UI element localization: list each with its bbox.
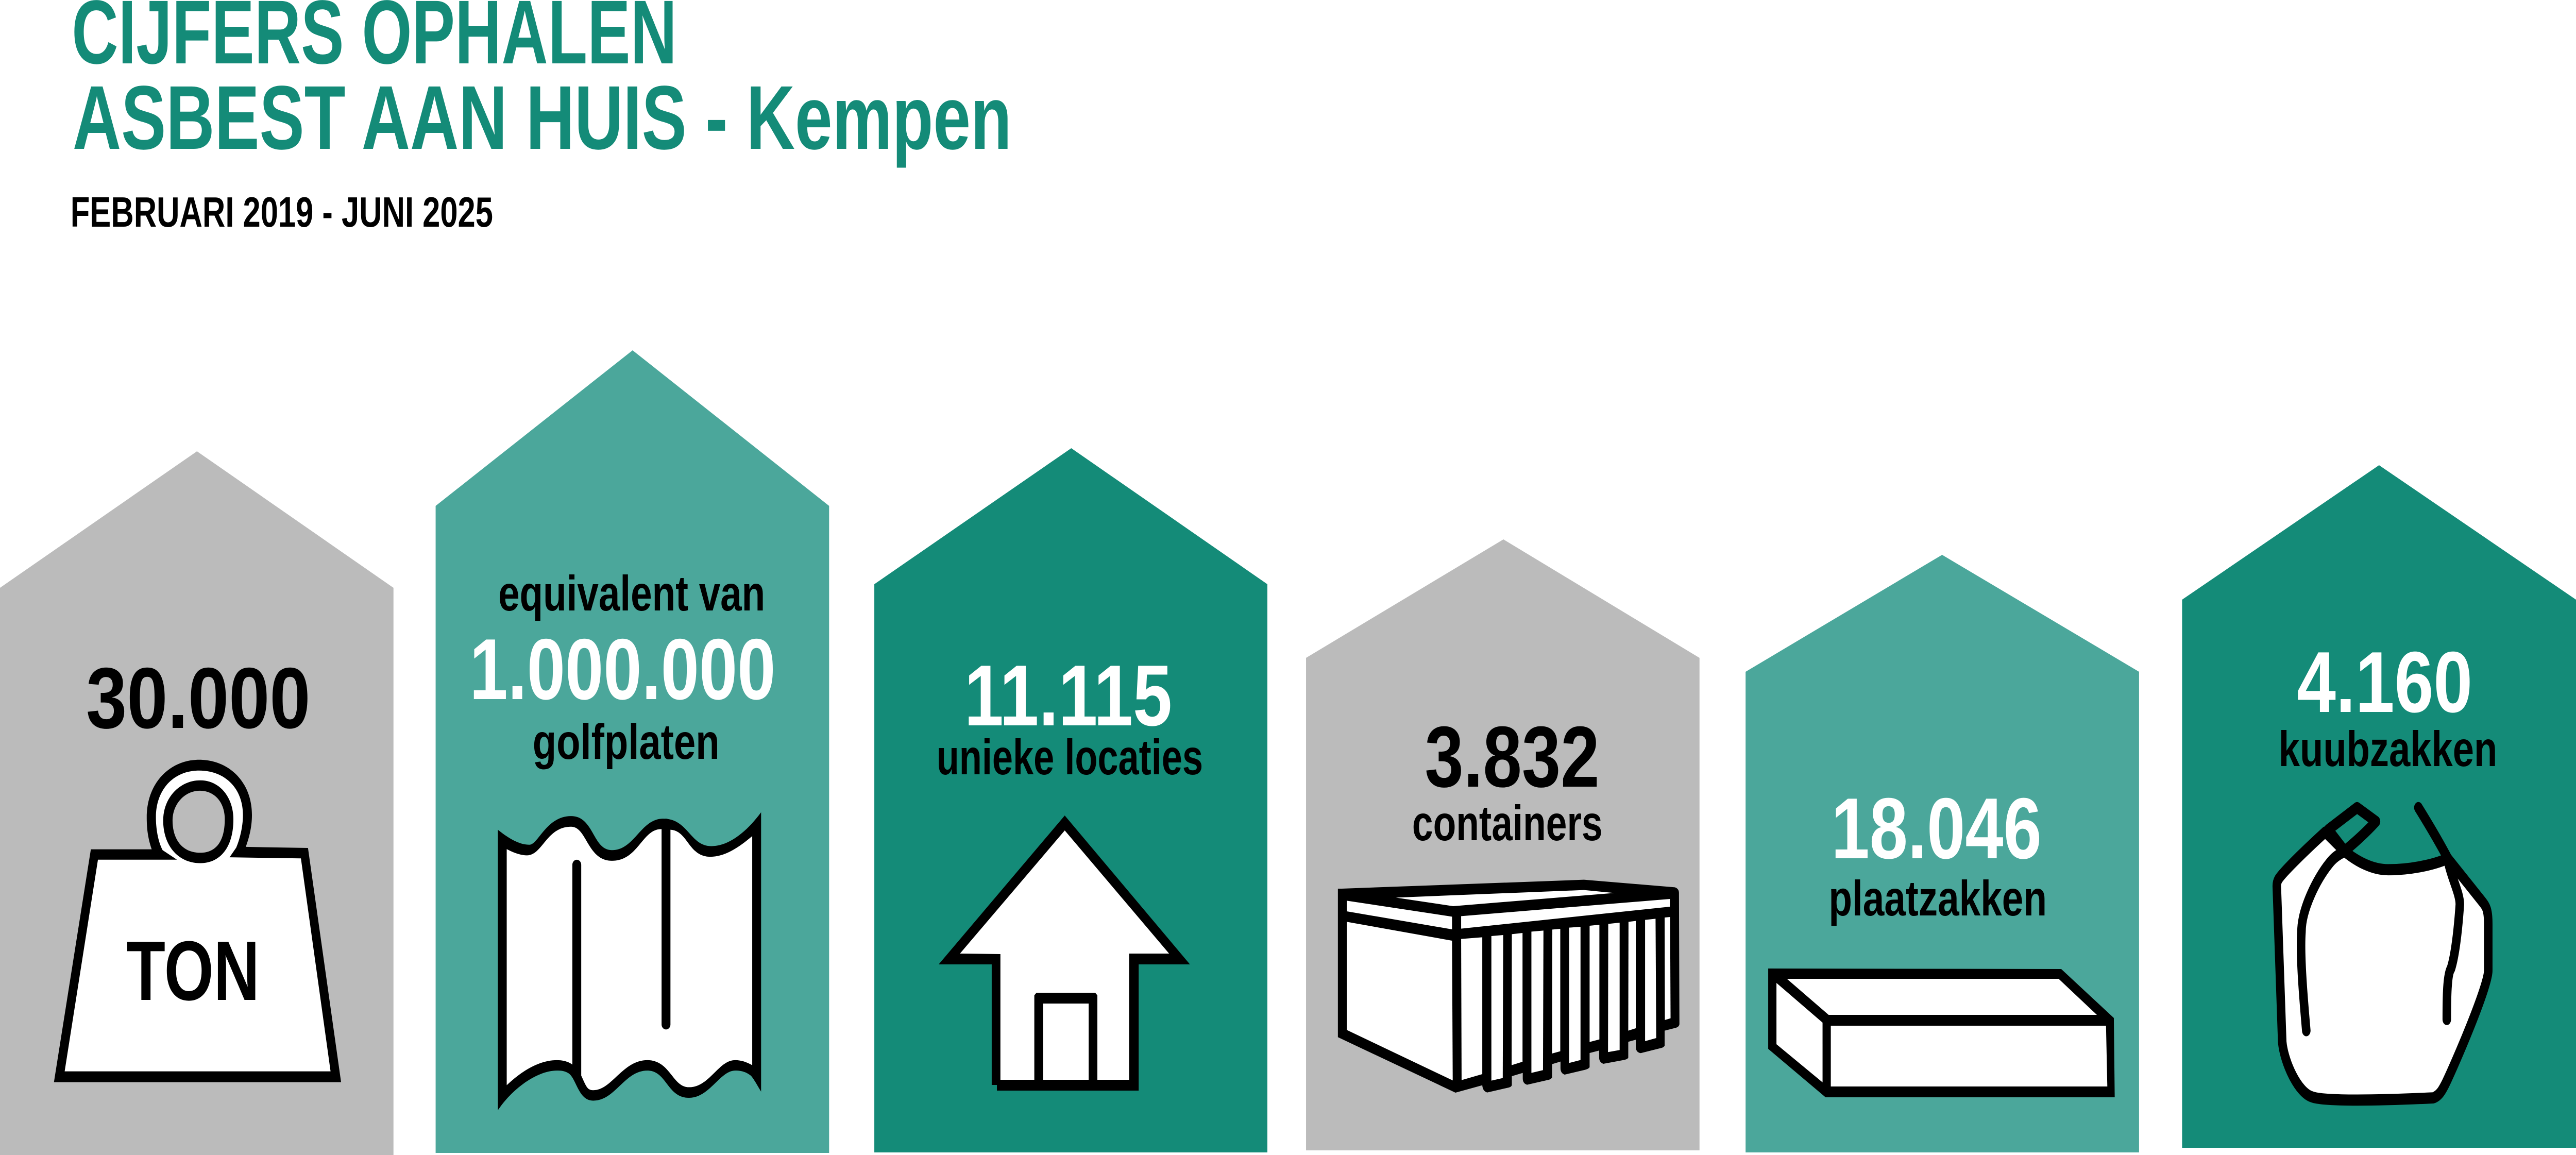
caption: golfplaten: golfplaten [533, 715, 720, 770]
icon: corrugated sheet [498, 812, 761, 1110]
icon: big bag [2277, 808, 2488, 1100]
icon: weight [54, 760, 341, 1082]
label: TON: TON [127, 924, 260, 1018]
house shape mid teal [436, 350, 829, 1153]
house shape dark teal [2182, 465, 2576, 1148]
caption: kuubzakken: kuubzakken [2279, 722, 2497, 777]
number: 11.115: 11.115 [964, 647, 1172, 744]
panel: 30.000 ton [0, 451, 394, 1155]
number: 18.046: 18.046 [1831, 780, 2042, 877]
house shape dark teal [874, 448, 1267, 1152]
icon: container [1338, 880, 1680, 1093]
number: 30.000: 30.000 [86, 650, 311, 746]
panel: 3.832 containers [1306, 539, 1700, 1150]
house shape grey [1306, 539, 1700, 1150]
panel: 1.000.000 golfplaten [436, 350, 829, 1153]
title line 2: ASBEST AAN HUIS - Kempen [73, 67, 1012, 168]
title block [71, 0, 1012, 236]
panel: 11.115 unieke locaties [874, 448, 1267, 1152]
icon: flat bag [1768, 969, 2115, 1097]
number: 4.160: 4.160 [2297, 634, 2472, 731]
panel: 4.160 kuubzakken [2182, 465, 2576, 1148]
house shape grey [0, 451, 394, 1155]
date range subtitle: FEBRUARI 2019 - JUNI 2025 [71, 188, 493, 236]
caption: equivalent van: equivalent van [498, 566, 765, 622]
house shape mid teal [1745, 555, 2139, 1152]
caption: containers: containers [1412, 796, 1603, 852]
icon: house [939, 816, 1190, 1091]
caption: unieke locaties: unieke locaties [937, 730, 1203, 786]
number: 1.000.000: 1.000.000 [469, 621, 775, 718]
number: 3.832: 3.832 [1425, 708, 1600, 805]
caption: plaatzakken: plaatzakken [1828, 871, 2047, 927]
panel: 18.046 plaatzakken [1745, 555, 2139, 1152]
